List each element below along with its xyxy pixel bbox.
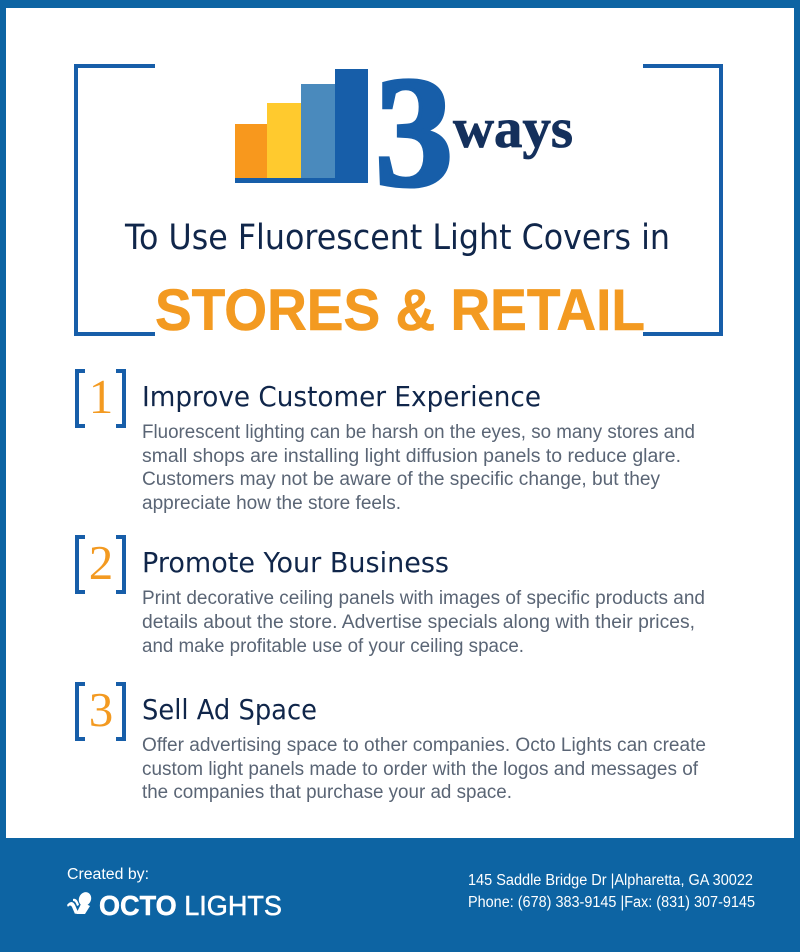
footer xyxy=(67,866,755,921)
body text 1 xyxy=(142,422,695,514)
body text 2: details about the store. Advertise specials along with their prices, xyxy=(142,612,695,633)
header bracket frame xyxy=(76,66,721,334)
subtitle: To Use Fluorescent Light Covers in xyxy=(124,218,670,258)
phone and fax: Phone: (678) 383-9145 |Fax: (831) 307-9145 xyxy=(468,894,755,911)
body text 1: small shops are installing light diffusion panels to reduce glare. xyxy=(142,446,681,467)
heading 3: Sell Ad Space xyxy=(142,693,317,726)
number badge 1: 1 xyxy=(89,369,113,424)
number badge 2: 2 xyxy=(89,535,113,590)
number badge 3: 3 xyxy=(89,682,113,737)
body text 2: Print decorative ceiling panels with images of specific products and xyxy=(142,588,705,609)
created by label: Created by: xyxy=(67,866,149,883)
icon: octopus logo xyxy=(67,890,93,914)
heading 1: Improve Customer Experience xyxy=(142,380,541,413)
body text 1: appreciate how the store feels. xyxy=(142,493,401,514)
body text 2: and make profitable use of your ceiling space. xyxy=(142,636,524,657)
section 3 xyxy=(77,682,706,803)
headline: STORES & RETAIL xyxy=(155,278,645,343)
body text 1: Customers may not be aware of the specific change, but they xyxy=(142,469,660,490)
number badge 1 xyxy=(77,369,124,426)
section 2 xyxy=(77,535,705,657)
number badge 3 xyxy=(77,682,124,739)
body text 1: Fluorescent lighting can be harsh on the eyes, so many stores and xyxy=(142,422,695,443)
icon: bar chart xyxy=(235,69,368,183)
number badge 2 xyxy=(77,535,124,592)
title numeral 3: 3 xyxy=(375,45,453,220)
body text 3: custom light panels made to order with the logos and messages of xyxy=(142,759,699,780)
body text 3: Offer advertising space to other companies. Octo Lights can create xyxy=(142,735,706,756)
body text 2 xyxy=(142,588,705,657)
logo wordmark: OCTO LIGHTS xyxy=(99,890,282,921)
body text 3: the companies that purchase your ad space. xyxy=(142,782,512,803)
section 1 xyxy=(77,369,695,514)
body text 3 xyxy=(142,735,706,803)
title word ways: ways xyxy=(453,98,573,160)
heading 2: Promote Your Business xyxy=(142,546,449,579)
address: 145 Saddle Bridge Dr |Alpharetta, GA 30022 xyxy=(468,872,753,889)
